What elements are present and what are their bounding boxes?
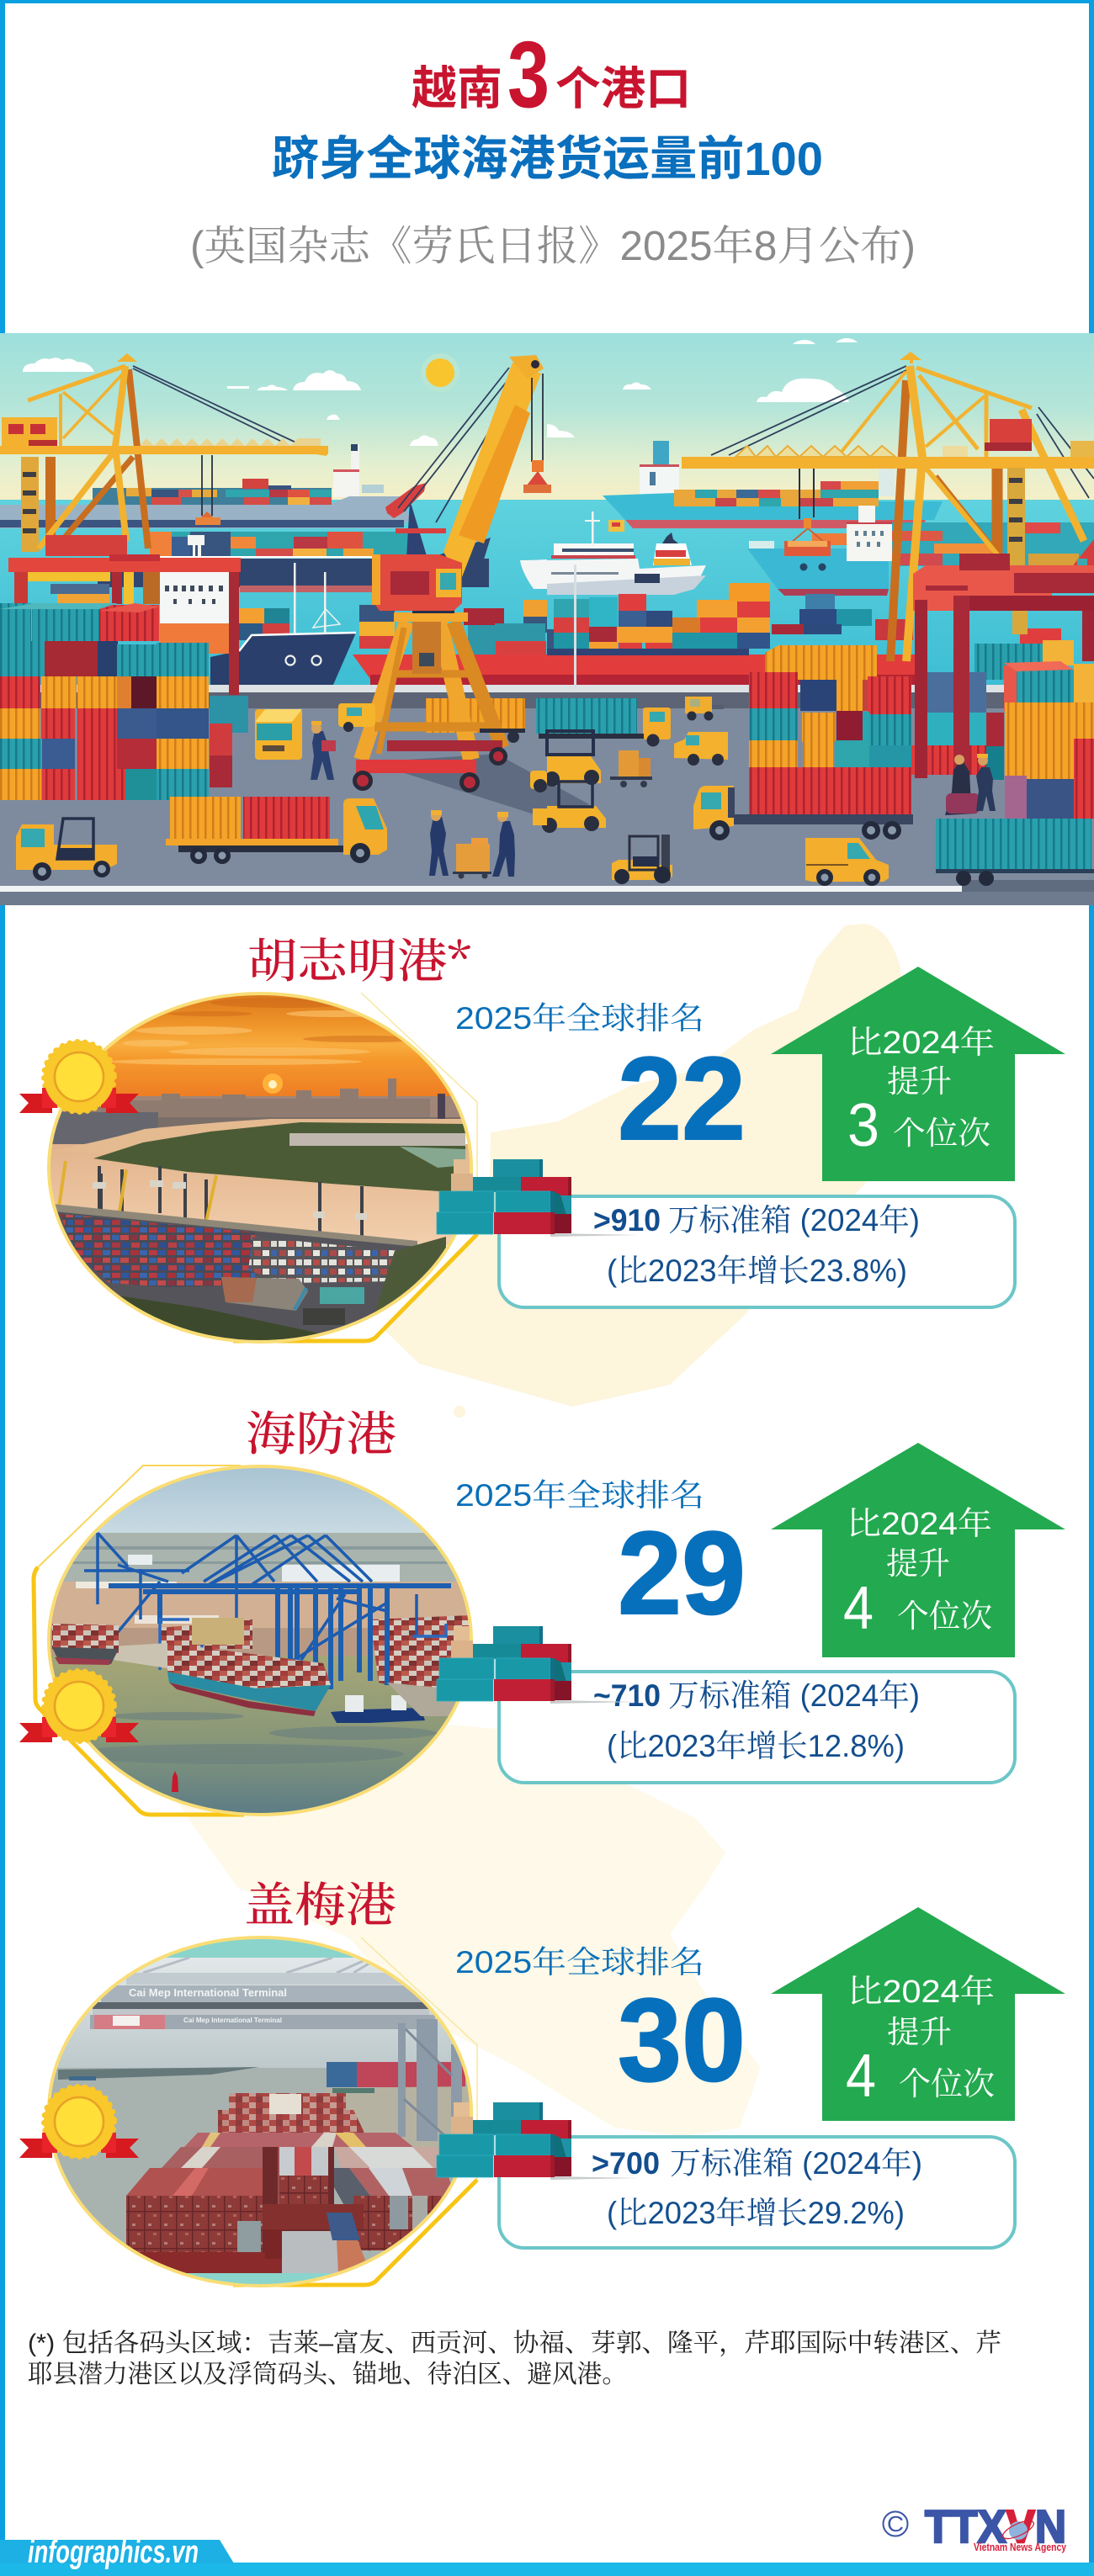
center tower crane — [353, 355, 551, 792]
throughput box: (比2023年增长12.8%) — [607, 1729, 905, 1763]
icon: containers — [437, 1159, 640, 1237]
teal trailer — [936, 819, 1094, 886]
title line 1 red: 个港口 — [555, 64, 691, 114]
footnote: 耶县潜力港区以及浮筒码头、锚地、待泊区、避风港。 — [28, 2361, 627, 2388]
foreground vehicle: left forklift — [16, 819, 117, 881]
green arrow with text — [771, 1907, 1065, 2121]
workers and forklifts mid ground — [311, 721, 652, 833]
rank label: 2025年全球排名 — [455, 1945, 704, 1980]
distant containers behind right crane — [892, 522, 1094, 566]
agency label: Vietnam News Agency — [974, 2542, 1066, 2553]
green arrow with text: 个位次 — [899, 2067, 995, 2102]
far ship with teal hull — [603, 441, 943, 528]
rank number: 29 — [618, 1507, 746, 1639]
sun — [421, 353, 459, 392]
left red gantry — [8, 535, 241, 695]
photo: sunset port — [49, 993, 474, 1346]
title block — [190, 22, 916, 269]
green arrow with text — [771, 1443, 1065, 1657]
background map silhouette — [173, 924, 905, 2136]
banner illustration: port scene — [0, 333, 1094, 905]
throughput box — [499, 2137, 1015, 2248]
green arrow with text: 3 — [847, 1092, 879, 1159]
globe — [1001, 2517, 1036, 2542]
throughput box: (比2023年增长29.2%) — [607, 2196, 905, 2230]
medal — [19, 1041, 139, 1113]
footnote — [28, 2330, 1001, 2388]
section: Hai Phong port — [19, 1397, 1065, 1815]
red trailer truck — [693, 767, 913, 840]
throughput box — [499, 1672, 1015, 1783]
throughput box: >700 — [592, 2146, 660, 2181]
title line 2 blue: 跻身全球海港货运量前100 — [272, 132, 823, 185]
icon: containers — [437, 1626, 640, 1704]
photo: container deck and terminal crane — [49, 1937, 471, 2287]
rank label: 2025年全球排名 — [455, 1478, 704, 1513]
source line: (英国杂志《劳氏日报》2025年8月公布) — [190, 224, 916, 269]
green arrow with text: 4 — [843, 1575, 874, 1642]
section: Ho Chi Minh port — [19, 925, 1065, 1346]
port name: 胡志明港* — [247, 925, 471, 992]
port name: 海防港 — [246, 1397, 396, 1465]
right container stacks and gantry — [749, 554, 1094, 819]
sky — [0, 333, 1094, 501]
green arrow with text: 个位次 — [893, 1116, 990, 1152]
foreground truck with orange and red containers — [166, 797, 387, 864]
green arrow with text: 4 — [846, 2043, 876, 2110]
throughput box: (比2023年增长23.8%) — [607, 1254, 907, 1288]
green arrow with text: 提升 — [887, 2015, 952, 2049]
photo: blue cranes and ship — [49, 1466, 471, 1815]
title line 1 red — [412, 22, 691, 127]
title line 1 red: 越南 — [412, 62, 502, 114]
footer bar — [0, 2535, 1094, 2576]
left port crane — [0, 353, 328, 552]
foreground forklift and van right — [612, 835, 889, 886]
workers at right — [945, 754, 996, 815]
hexagon frame — [233, 993, 477, 1341]
hexagon frame — [34, 1466, 244, 1815]
section: Cai Mep port — [19, 1868, 1065, 2287]
right port crane — [682, 352, 1094, 661]
icon: containers — [437, 2102, 640, 2180]
crane signage lower: Cai Mep International Terminal — [183, 2017, 282, 2024]
left container stacks — [0, 603, 248, 800]
medal — [19, 1670, 139, 1742]
lamp pole — [574, 564, 576, 689]
green arrow with text: 比2024年 — [847, 1974, 995, 2010]
green arrow with text: 比2024年 — [847, 1026, 995, 1061]
rank number: 22 — [618, 1032, 746, 1164]
throughput box — [499, 1196, 1015, 1307]
throughput box: 万标准箱 (2024年) — [668, 1203, 920, 1238]
throughput box: 万标准箱 (2024年) — [670, 2146, 922, 2181]
throughput box: >910 — [593, 1203, 661, 1238]
photo border — [49, 994, 471, 1342]
website label: infographics.vn — [28, 2535, 199, 2570]
second teal ship at right — [747, 506, 892, 596]
quay edge and ground — [0, 685, 1094, 905]
photo border — [49, 1466, 471, 1815]
back vehicles — [255, 697, 728, 766]
navy sail boat — [210, 563, 356, 685]
TTXVN logo — [884, 2500, 1066, 2553]
crane signage upper: Cai Mep International Terminal — [129, 1986, 287, 1999]
far ship with grey hull — [0, 444, 411, 528]
wordmark: TTXVN — [925, 2500, 1066, 2552]
green arrow with text: 个位次 — [897, 1599, 992, 1635]
title line 1 red: 3 — [507, 22, 550, 127]
green arrow with text: 提升 — [887, 1064, 952, 1099]
port name: 盖梅港 — [244, 1868, 396, 1936]
throughput box: 万标准箱 (2024年) — [668, 1678, 920, 1713]
mid white cruise ship — [520, 511, 706, 595]
rank label: 2025年全球排名 — [455, 1001, 704, 1036]
workers with cart — [429, 810, 515, 878]
copyright mark — [884, 2511, 907, 2536]
green arrow with text — [771, 967, 1065, 1181]
medal — [19, 2086, 139, 2158]
near red container ship — [353, 583, 917, 685]
copyright mark: C — [887, 2511, 904, 2536]
mid navy container ship — [98, 483, 491, 592]
photo border — [49, 1937, 471, 2286]
footnote: (*) 包括各码头区域：吉莱–富友、西贡河、协福、芽郭、隆平，芹耶国际中转港区、芹 — [28, 2330, 1001, 2357]
sea — [0, 500, 1094, 689]
rank number: 30 — [618, 1974, 746, 2106]
hexagon frame — [233, 1937, 477, 2285]
green arrow with text: 提升 — [886, 1546, 950, 1581]
green arrow with text: 比2024年 — [847, 1507, 992, 1542]
clouds — [23, 338, 858, 446]
throughput box: ~710 — [593, 1678, 661, 1713]
